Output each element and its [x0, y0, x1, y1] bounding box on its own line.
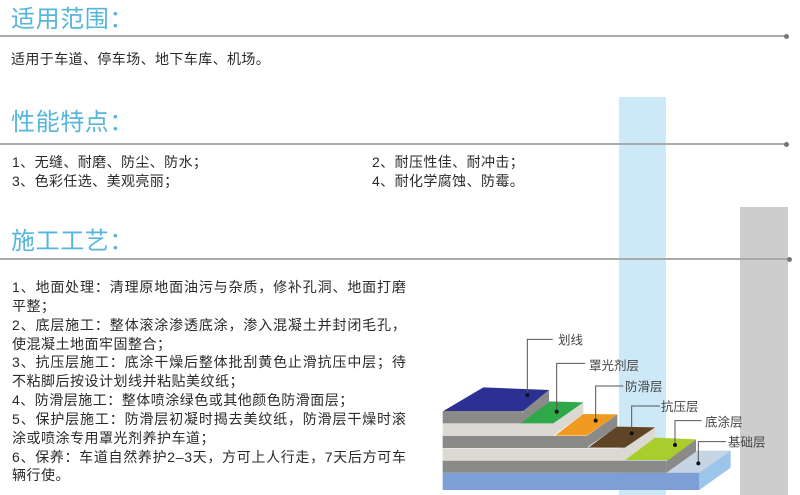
heading rule with dot: process	[0, 257, 792, 262]
heading rule with dot: scope	[0, 34, 789, 39]
text: process steps: 1、地面处理：清理原地面油污与杂质，修补孔洞、地面打磨	[12, 279, 407, 295]
text: process steps: 使混凝土地面牢固整合；	[12, 336, 172, 352]
text: scope: 适用于车道、停车场、地下车库、机场。	[11, 51, 270, 67]
diagram labels: 底涂层	[705, 414, 743, 430]
leader dots	[525, 393, 700, 465]
text: process steps: 辆行使。	[12, 467, 70, 483]
text: features list	[12, 154, 524, 189]
heading: process: 施工工艺：	[11, 228, 134, 255]
text: process steps: 4、防滑层施工：整体喷涂绿色或其他颜色防滑面层；	[12, 392, 354, 408]
grey vertical band	[740, 207, 788, 495]
leader lines	[527, 339, 726, 463]
text: features list: 1、无缝、耐磨、防尘、防水；	[12, 154, 207, 170]
text: process steps: 平整；	[12, 298, 56, 314]
text: process steps	[12, 279, 407, 483]
text: process steps: 3、抗压层施工：底涂干燥后整体批刮黄色止滑抗压中层；待	[12, 354, 407, 370]
diagram labels: 罩光剂层	[589, 358, 639, 373]
text: features list: 2、耐压性佳、耐冲击；	[372, 154, 524, 170]
text: features list: 3、色彩任选、美观亮丽；	[12, 173, 179, 189]
text: process steps: 不粘脚后按设计划线并粘贴美纹纸；	[12, 373, 244, 389]
layer: base	[443, 451, 731, 490]
layer: marking line	[443, 387, 549, 423]
diagram labels	[558, 334, 766, 450]
light blue vertical band	[619, 97, 666, 495]
heading: features: 性能特点：	[11, 109, 134, 136]
layer: primer	[443, 438, 696, 473]
text: process steps: 6、保养：车道自然养护2–3天，方可上人行走，7天后方可车	[12, 449, 407, 465]
layer: sealer	[443, 401, 583, 436]
text: process steps: 5、保护层施工：防滑层初凝时揭去美纹纸，防滑层干燥时滚	[12, 411, 407, 427]
diagram labels: 划线	[558, 334, 584, 348]
heading rule with dot: features	[0, 142, 789, 147]
heading: scope: 适用范围：	[11, 6, 134, 33]
diagram labels: 防滑层	[625, 379, 663, 394]
text: features list: 4、耐化学腐蚀、防霉。	[372, 173, 524, 189]
text: process steps: 涂或喷涂专用罩光剂养护车道；	[12, 430, 215, 446]
text: process steps: 2、底层施工：整体滚涂渗透底涂，渗入混凝土并封闭毛孔，	[12, 317, 407, 333]
layer: anti-slip	[443, 414, 617, 448]
layer: compression	[443, 427, 655, 461]
diagram labels: 抗压层	[661, 399, 699, 414]
diagram labels: 基础层	[728, 436, 766, 450]
